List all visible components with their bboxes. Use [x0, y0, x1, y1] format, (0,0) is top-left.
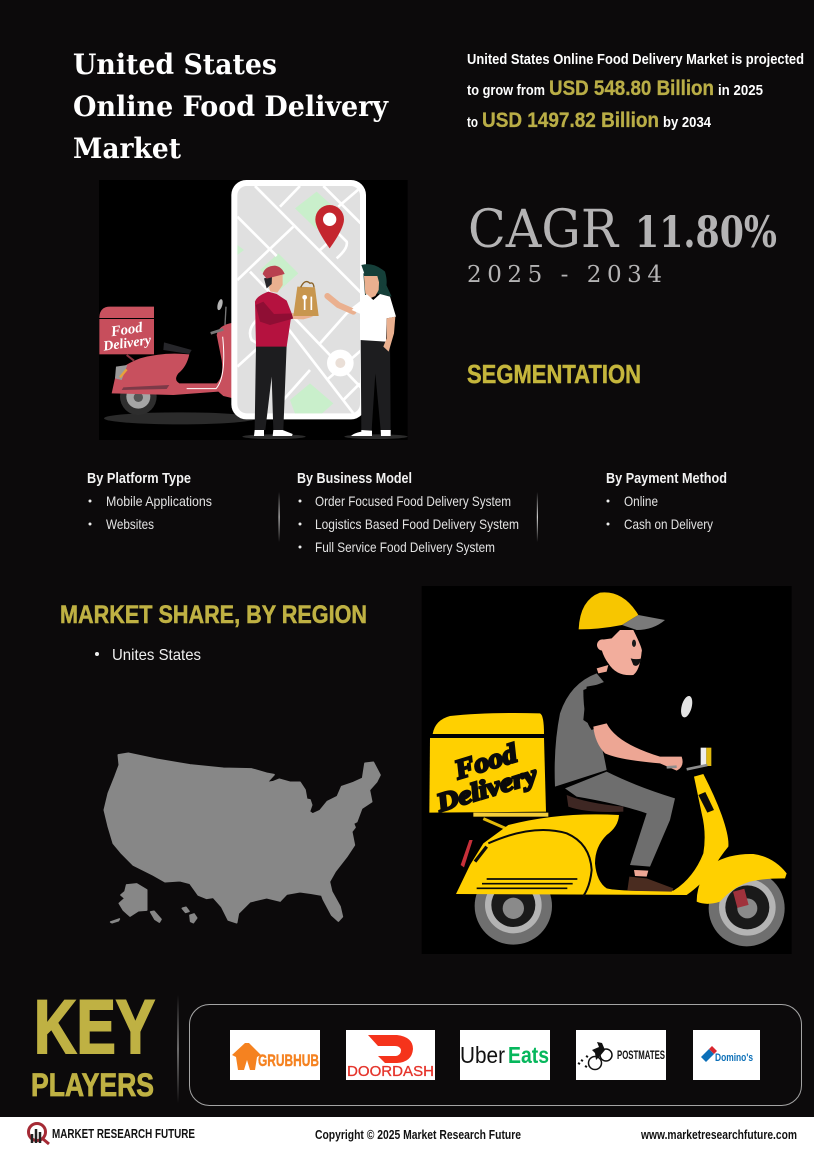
logo: Domino's: Domino's [715, 1052, 753, 1064]
logo: Uber Eats: Eats [508, 1042, 549, 1068]
front wheel [709, 870, 785, 946]
logo: Market Research Future [28, 1124, 195, 1144]
delivery box [429, 713, 548, 830]
customer woman [327, 264, 396, 436]
delivery box: Delivery [432, 759, 541, 818]
market projection text: by 2034 [663, 114, 712, 131]
market projection text: USD 548.80 Billion [549, 77, 714, 100]
map of United States [104, 753, 380, 923]
segment: platform type: By Platform Type [87, 470, 191, 487]
key players heading: KEY [34, 985, 155, 1070]
segment: business model: Logistics Based Food Delivery System [315, 516, 519, 532]
scooter body [456, 774, 787, 904]
market projection text: USD 1497.82 Billion [482, 109, 659, 132]
key players heading: PLAYERS [31, 1067, 154, 1103]
segment: business model: Order Focused Food Delivery System [315, 493, 511, 509]
segment: platform type [87, 470, 212, 532]
market share heading: MARKET SHARE, BY REGION [60, 601, 367, 629]
copyright: Copyright © 2025 Market Research Future [315, 1128, 521, 1142]
rear wheel [475, 867, 552, 945]
market projection text: in 2025 [718, 82, 763, 99]
segment: payment method [606, 470, 727, 532]
box label: Delivery [101, 333, 153, 355]
segment: payment method: Online [624, 493, 658, 509]
title: Online Food Delivery [73, 90, 389, 123]
logo: Grubhub: GRUBHUB [258, 1051, 319, 1070]
segment: business model: By Business Model [297, 470, 412, 487]
logo: Market Research Future: MARKET RESEARCH FUTURE [52, 1127, 195, 1141]
segment: payment method: Cash on Delivery [624, 516, 713, 532]
illustration: rider on yellow scooter [422, 586, 792, 954]
delivery box: Food [450, 738, 521, 785]
title: United States [73, 48, 277, 81]
key players panel [190, 1004, 802, 1106]
phone with map [231, 180, 366, 419]
rider [555, 592, 683, 892]
CAGR figure: 11.80% [635, 208, 777, 258]
logo: Postmates: POSTMATES [617, 1048, 665, 1062]
seat [567, 795, 623, 812]
title: Market [73, 132, 181, 165]
food bag [293, 282, 319, 316]
CAGR figure: CAGR [468, 200, 620, 260]
logo: Uber Eats [460, 1030, 550, 1080]
box label: Food [109, 320, 144, 340]
illustration: food delivery handover with phone map [99, 180, 408, 440]
box label [101, 320, 153, 355]
logo: Grubhub [230, 1030, 320, 1080]
market projection text [467, 51, 804, 132]
segment: business model: Full Service Food Delivery System [315, 539, 495, 555]
region list: Unites States [112, 647, 201, 664]
segment: platform type: Mobile Applications [106, 493, 212, 509]
CAGR figure [468, 200, 777, 260]
logo: DoorDash [346, 1030, 435, 1080]
red scooter [99, 299, 233, 415]
key players heading [31, 985, 155, 1103]
segment: payment method: By Payment Method [606, 470, 727, 487]
forecast period: 2025 - 2034 [467, 262, 662, 288]
segmentation heading: SEGMENTATION [467, 359, 641, 389]
market projection text: to [467, 114, 478, 131]
logo: Uber Eats: Uber [460, 1042, 505, 1068]
logo: DoorDash: DOORDASH [347, 1063, 434, 1080]
logo: Postmates [576, 1030, 666, 1080]
market projection text: to grow from [467, 82, 545, 99]
segment: platform type: Websites [106, 516, 154, 532]
map pin [315, 205, 344, 248]
segment: business model [297, 470, 519, 555]
mirror and headlight [667, 695, 711, 769]
logo: Domino's [693, 1030, 760, 1080]
footer [0, 1117, 814, 1150]
delivery man [254, 266, 313, 436]
title [73, 48, 389, 165]
